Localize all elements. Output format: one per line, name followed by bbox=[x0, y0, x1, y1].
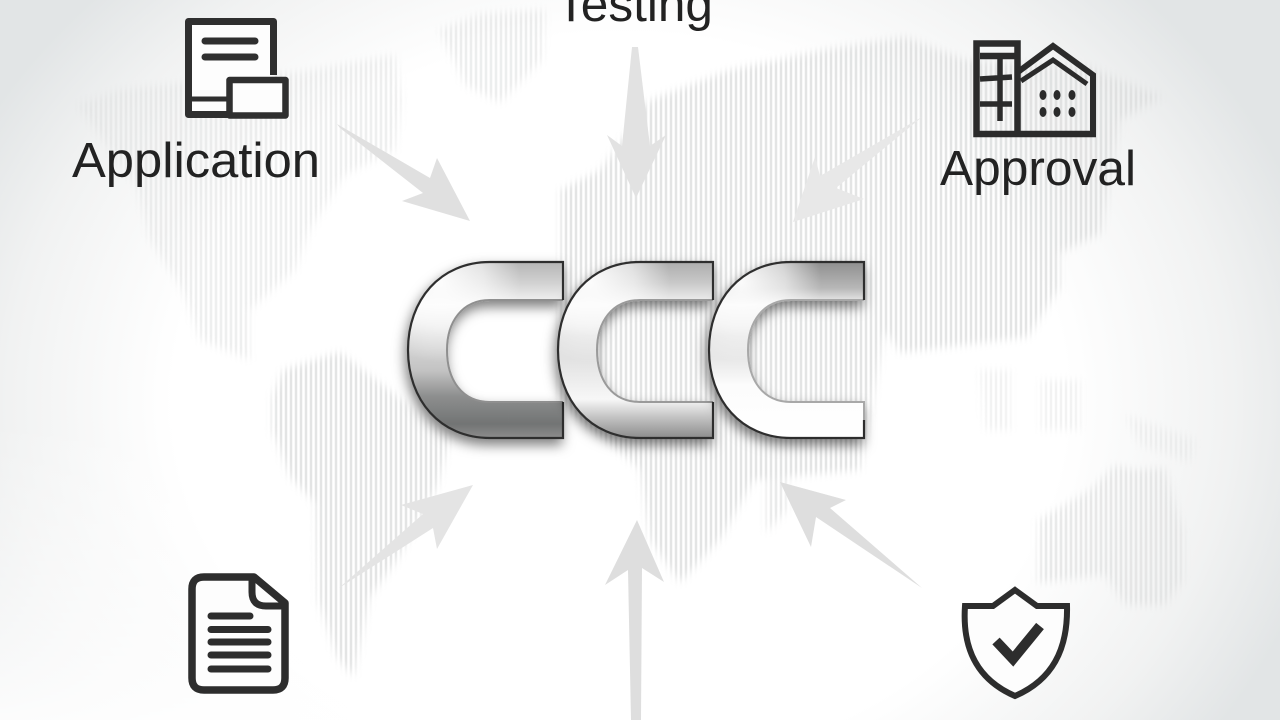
arrow: approval to CCC bbox=[793, 117, 922, 222]
label: Approval: Approval bbox=[940, 142, 1136, 196]
CCC logo bbox=[408, 262, 864, 438]
label: Application: Application bbox=[72, 134, 320, 188]
world map: striped dots bbox=[86, 10, 1186, 674]
arrow: document to CCC bbox=[339, 485, 473, 588]
arrow: application to CCC bbox=[337, 124, 470, 221]
letter C 1 bbox=[408, 262, 563, 438]
icon: shield with check bbox=[965, 590, 1067, 696]
arrow: shield to CCC bbox=[780, 482, 922, 588]
step: Approval bbox=[940, 44, 1136, 196]
arrow: testing to CCC bbox=[607, 47, 666, 198]
letter C 3 bbox=[709, 262, 864, 438]
step: Application bbox=[72, 22, 320, 188]
icon: document bbox=[192, 577, 285, 690]
arrow: bottom to CCC bbox=[605, 520, 664, 720]
icon: factory and house bbox=[976, 44, 1096, 134]
letter C 2 bbox=[558, 262, 713, 438]
icon: application form bbox=[188, 22, 286, 116]
